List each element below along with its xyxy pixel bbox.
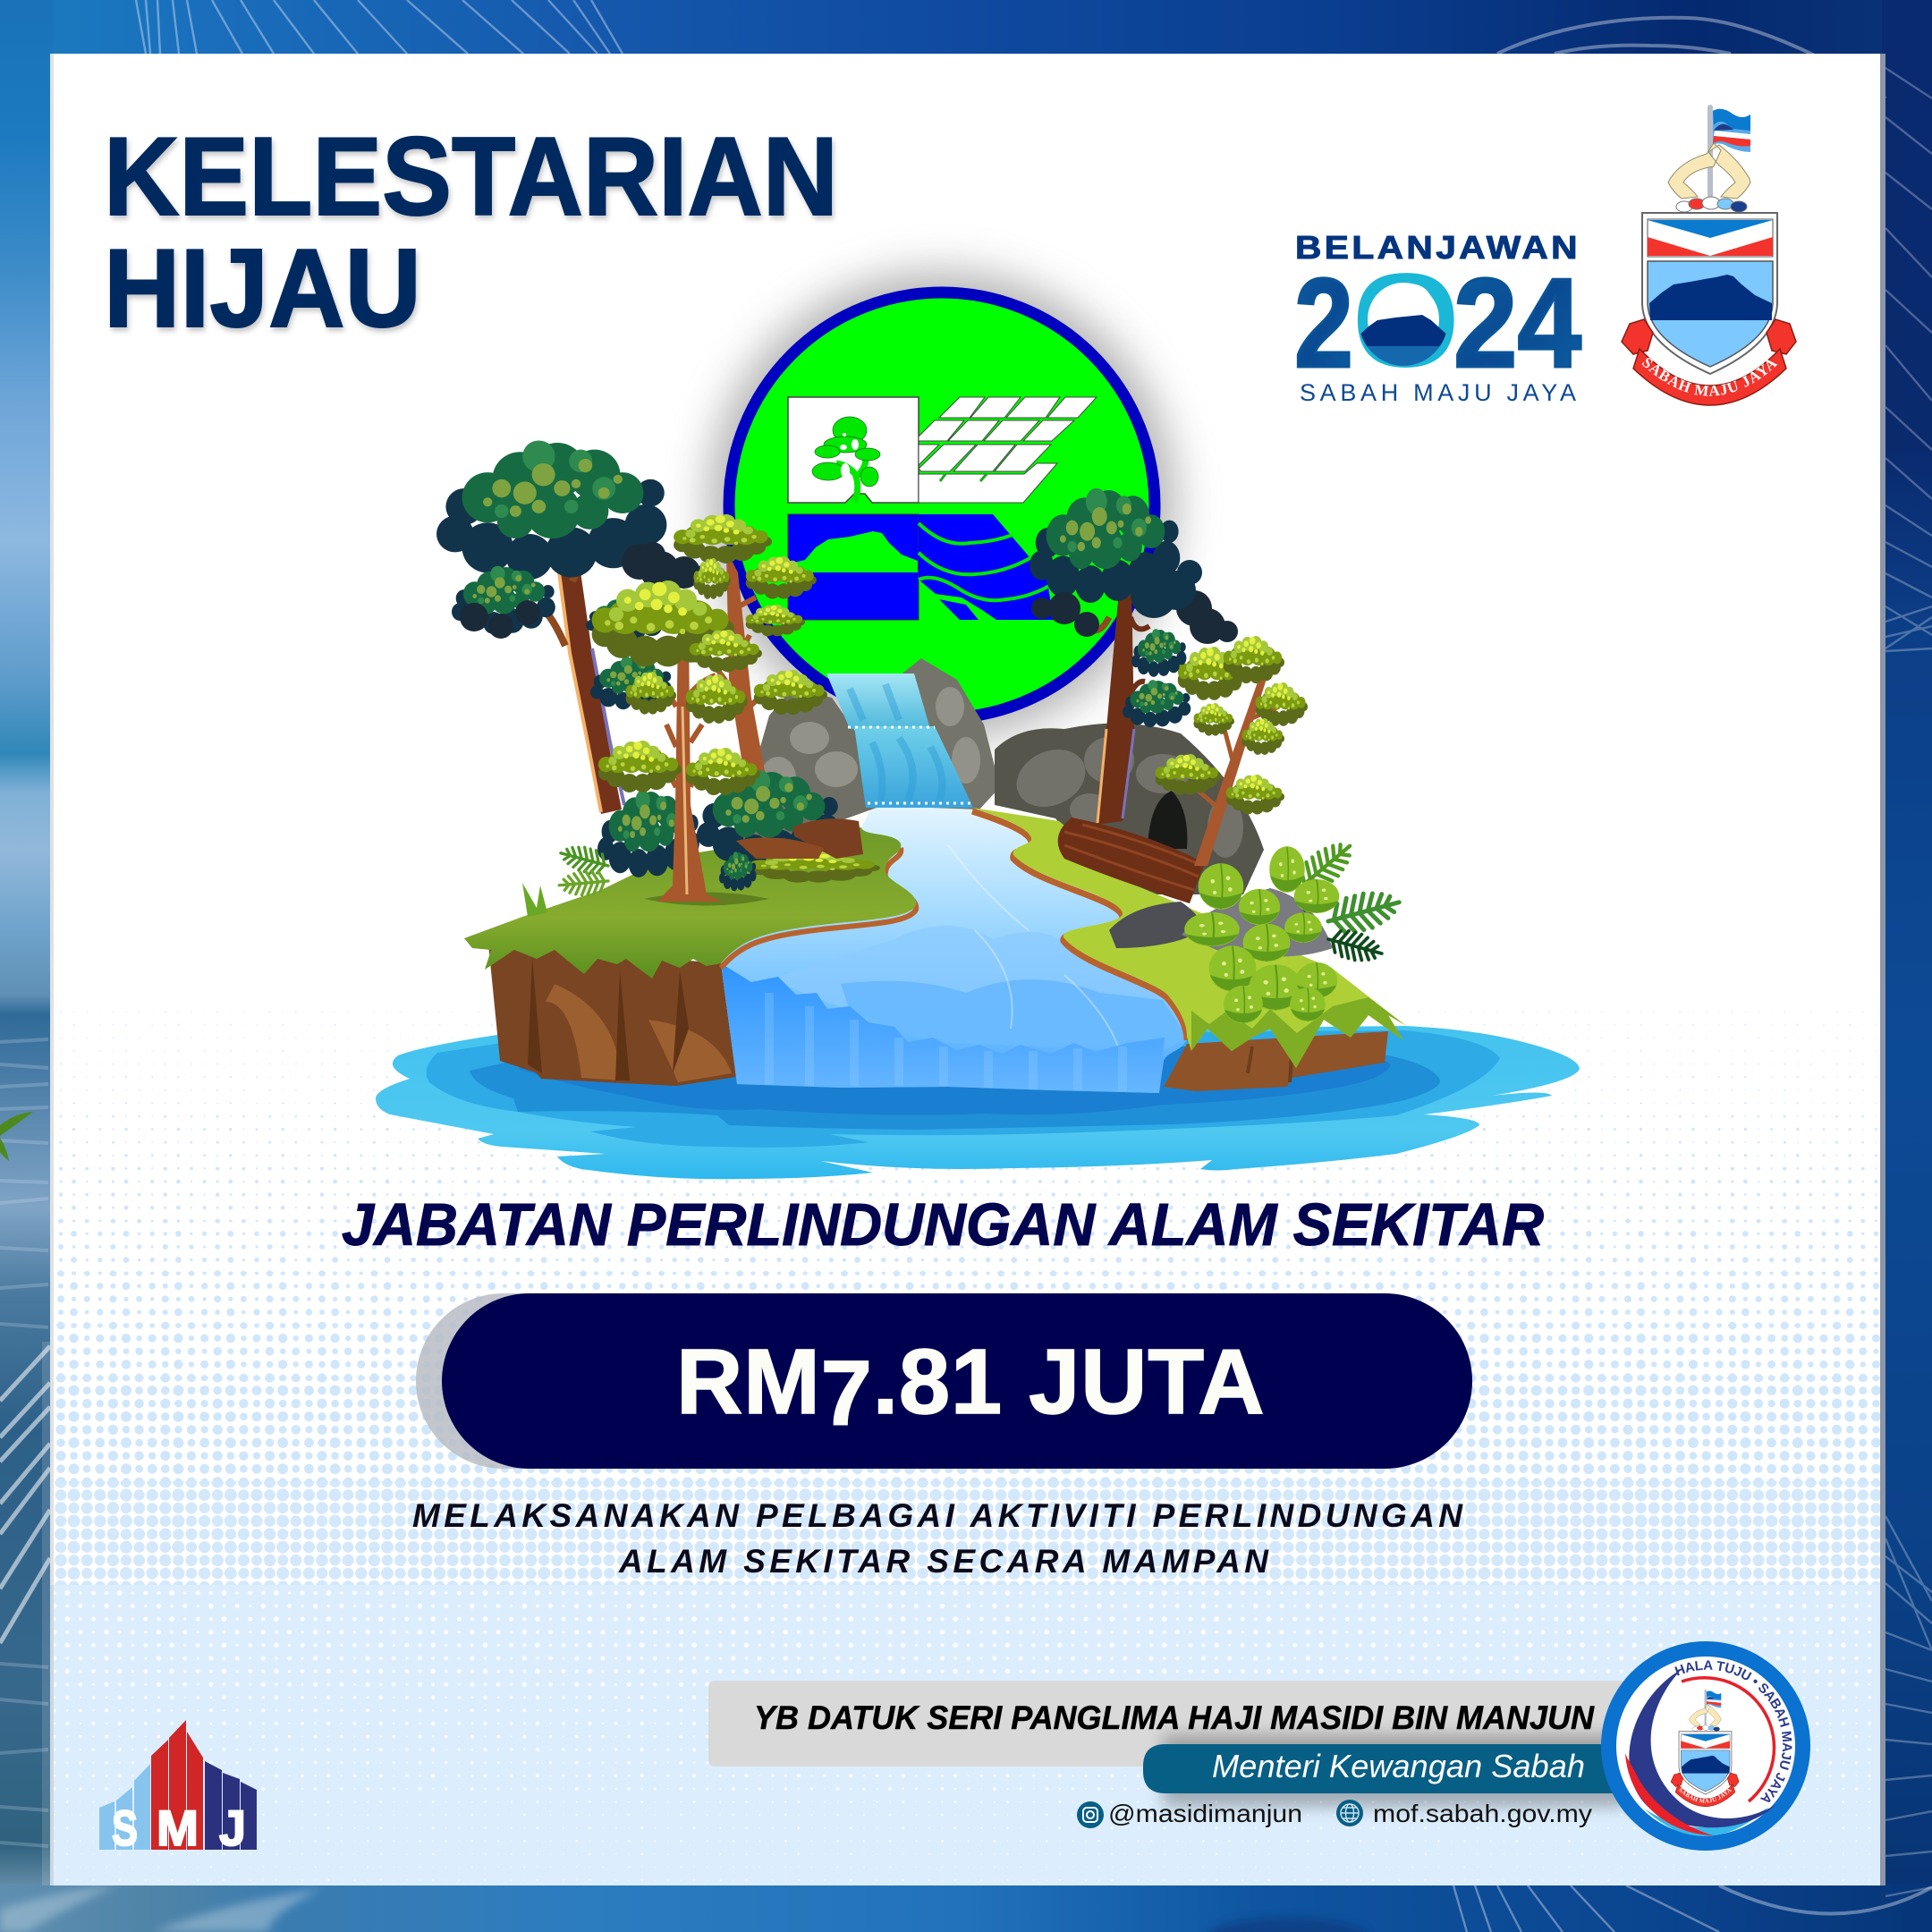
heading: department name: JABATAN PERLINDUNGAN ALAM SEKITAR [342, 1191, 1544, 1258]
minister title bar [1143, 1735, 1628, 1807]
grey boulders [1109, 888, 1333, 957]
right lime tree [1156, 636, 1308, 866]
logo: Sabah state crest [1621, 105, 1797, 406]
palm frond in the background [0, 1112, 33, 1161]
minister name bar [708, 1681, 1630, 1767]
grid of land parcels [919, 397, 1097, 503]
shrubs and small rocks [522, 770, 880, 917]
waterfall rocks [717, 658, 1264, 894]
social handle with Instagram icon: @masidimanjun [1108, 1800, 1302, 1827]
back lime tree [674, 514, 827, 809]
pill: allocation amount [416, 1293, 1472, 1469]
logo: Sabah state crest: SABAH MAJU JAYA [1642, 358, 1778, 396]
logo: Belanjawan 2024 [1294, 229, 1581, 406]
logo: SMJ: S [112, 1800, 138, 1856]
logo: Hala Tuju round badge [1601, 1641, 1810, 1851]
logo: SMJ [99, 1720, 257, 1856]
river drop [721, 963, 1165, 1093]
river [721, 805, 1187, 1093]
middle lime tree [592, 580, 762, 902]
minister title bar: Menteri Kewangan Sabah [1212, 1748, 1585, 1784]
pill: allocation amount: RM [676, 1330, 821, 1433]
description text: MELAKSANAKAN PELBAGAI AKTIVITI PERLINDUNGAN [412, 1497, 1463, 1534]
logo: Belanjawan 2024: BELANJAWAN [1295, 229, 1580, 266]
title [104, 115, 838, 351]
description text: ALAM SEKITAR SECARA MAMPAN [618, 1543, 1269, 1580]
left dark tree [436, 440, 709, 814]
waterfall [826, 674, 973, 808]
log [1058, 818, 1205, 903]
minister name bar: YB DATUK SERI PANGLIMA HAJI MASIDI BIN MANJUN [754, 1699, 1595, 1736]
title: HIJAU [104, 227, 421, 351]
left ground [464, 827, 916, 979]
title: KELESTARIAN [104, 115, 838, 239]
right cliff [1164, 1031, 1388, 1091]
pill: allocation amount: 7 [821, 1342, 873, 1445]
logo: Belanjawan 2024: 0 [1351, 246, 1461, 394]
river waves [769, 845, 1187, 1051]
left cliff [488, 944, 736, 1086]
logo: environment department green circle [708, 271, 1176, 740]
right ground [972, 808, 1405, 1068]
illustration: island with river, waterfall and trees [376, 440, 1580, 1179]
website with globe icon: mof.sabah.gov.my [1373, 1800, 1592, 1827]
logo: Belanjawan 2024: SABAH MAJU JAYA [1300, 379, 1576, 406]
logo: Belanjawan 2024: 24 [1453, 252, 1581, 394]
bonsai tree icon [812, 417, 880, 503]
pill: allocation amount: .81 JUTA [873, 1330, 1265, 1433]
logo: SMJ: M [157, 1800, 199, 1856]
pond [376, 1026, 1580, 1179]
right leafy plant [1184, 846, 1339, 1023]
logo: Hala Tuju round badge: HALA TUJU • SABAH MAJU JAYA [1674, 1660, 1792, 1803]
logo: SMJ: J [219, 1800, 246, 1856]
logo: Belanjawan 2024: 2 [1294, 252, 1353, 394]
right dark tree [1030, 488, 1238, 825]
right ferns [1291, 834, 1403, 966]
description text [412, 1497, 1463, 1580]
